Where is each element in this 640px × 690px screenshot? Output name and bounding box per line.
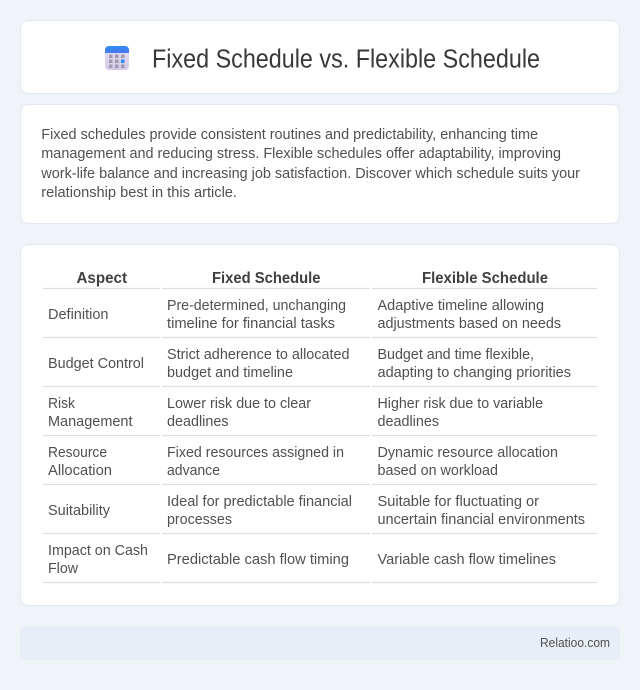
row: risk management: deadlines xyxy=(378,414,439,430)
table header row: Flexible Schedule xyxy=(422,270,548,287)
table header row xyxy=(76,270,548,287)
row: risk management: Lower risk due to clear xyxy=(167,396,311,412)
row: resource allocation: Fixed resources assigned in xyxy=(167,445,344,461)
row: resource allocation: Resource xyxy=(48,445,107,461)
row: risk management: Risk xyxy=(48,396,76,412)
row: impact on cash flow: Impact on Cash xyxy=(48,543,148,559)
row: budget control: budget and timeline xyxy=(167,365,293,381)
footer credit: Relatioo.com xyxy=(540,635,610,650)
row: budget control: Budget and time flexible, xyxy=(378,347,534,363)
row: budget control: adapting to changing priorities xyxy=(378,365,571,381)
row: definition: adjustments based on needs xyxy=(378,316,561,332)
row: impact on cash flow: Flow xyxy=(48,561,78,577)
row: resource allocation xyxy=(48,445,558,479)
row: suitability: Ideal for predictable financial xyxy=(167,494,352,510)
row: suitability: Suitability xyxy=(48,503,111,519)
row: resource allocation: based on workload xyxy=(378,463,498,479)
row: resource allocation: Dynamic resource allocation xyxy=(378,445,558,461)
row: suitability: processes xyxy=(167,512,232,528)
panel: introduction xyxy=(20,104,620,224)
intro text xyxy=(40,126,580,201)
row: budget control: Strict adherence to allocated xyxy=(167,347,350,363)
row: suitability: Suitable for fluctuating or xyxy=(378,494,539,510)
intro text: relationship best in this article. xyxy=(41,184,237,201)
row: risk management xyxy=(48,396,543,430)
intro text: work-life balance and increasing job satisfaction. Discover which schedule suits your xyxy=(40,165,580,182)
panel: header card xyxy=(20,20,620,94)
icon: calendar xyxy=(105,46,129,70)
row: definition: Pre-determined, unchanging xyxy=(167,298,346,314)
row: impact on cash flow: Variable cash flow timelines xyxy=(378,552,556,568)
row: budget control: Budget Control xyxy=(48,356,144,372)
intro text: Fixed schedules provide consistent routines and predictability, enhancing time xyxy=(41,126,538,143)
row: definition: timeline for financial tasks xyxy=(167,316,335,332)
row: risk management: deadlines xyxy=(167,414,228,430)
row: suitability xyxy=(48,494,585,528)
row: definition: Definition xyxy=(48,307,108,323)
row: definition xyxy=(48,298,561,332)
row: suitability: uncertain financial environments xyxy=(378,512,585,528)
row: definition: Adaptive timeline allowing xyxy=(378,298,544,314)
row: resource allocation: Allocation xyxy=(48,463,112,479)
row: risk management: Management xyxy=(48,414,132,430)
intro text: management and reducing stress. Flexible schedules offer adaptability, improving xyxy=(41,145,561,162)
row: resource allocation: advance xyxy=(167,463,220,479)
table header row: Fixed Schedule xyxy=(212,270,321,287)
footer bar xyxy=(20,626,620,660)
panel: comparison table xyxy=(20,244,620,606)
row: impact on cash flow xyxy=(48,543,556,577)
row: budget control xyxy=(48,347,571,381)
title: Fixed Schedule vs. Flexible Schedule xyxy=(152,46,540,74)
table header row: Aspect xyxy=(76,270,128,287)
row: impact on cash flow: Predictable cash flow timing xyxy=(167,552,349,568)
row: risk management: Higher risk due to variable xyxy=(378,396,543,412)
